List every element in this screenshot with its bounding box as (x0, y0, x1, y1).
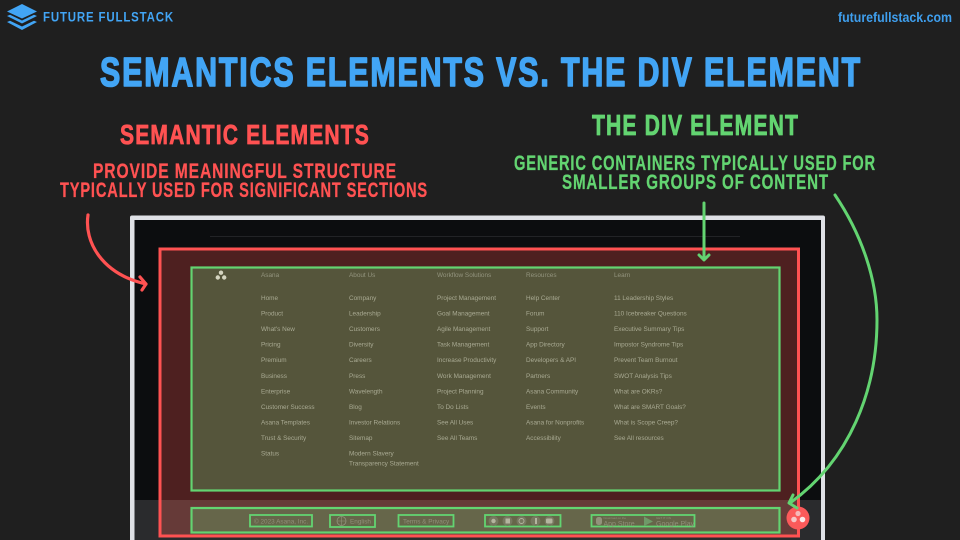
footer column: Asana: Pricing (261, 342, 281, 349)
footer column: About Us (349, 272, 419, 468)
footer column: Workflow Solutions: See All Teams (437, 435, 477, 442)
footer column: Workflow Solutions: Project Management (437, 295, 496, 302)
footer column: Learn: Prevent Team Burnout (614, 357, 678, 364)
heading: the div element: THE DIV ELEMENT (592, 110, 799, 142)
arrow: green curve to bottom badge (789, 195, 877, 508)
footer column: Asana (261, 272, 315, 458)
footer column: About Us: Investor Relations (349, 420, 400, 426)
footer column: Resources: Partners (526, 373, 550, 380)
footer column: Learn: 110 Icebreaker Questions (614, 311, 687, 318)
footer column: Learn: See All resources (614, 435, 664, 442)
footer column: Learn: What are OKRs? (614, 388, 663, 395)
app store badges box: App Store (604, 521, 635, 528)
logo: Future Fullstack (7, 4, 174, 30)
footer column: Asana: Product (261, 311, 283, 318)
footer column: Resources: Resources (526, 272, 557, 279)
footer column: Resources: Developers & API (526, 357, 576, 364)
copyright box: © 2023 Asana, Inc. (254, 517, 308, 525)
footer column: Resources: Asana Community (526, 388, 579, 395)
arrow: red to semantic box (87, 215, 146, 290)
icon: stacked layers (7, 4, 37, 30)
copyright box (250, 515, 312, 526)
footer column: Asana: Enterprise (261, 388, 291, 395)
footer column: Workflow Solutions: Increase Productivity (437, 357, 497, 364)
footer column: Workflow Solutions: Agile Management (437, 326, 491, 333)
app store badges box: GET IT ON (656, 516, 671, 520)
div highlight: bottom bar container (192, 508, 780, 532)
footer column: Asana: What's New (261, 326, 295, 333)
footer column: Learn: What is Scope Creep? (614, 420, 678, 426)
panel: semantic elements description (60, 119, 428, 202)
language box: English (350, 518, 371, 526)
terms box (398, 515, 454, 526)
div highlight: footer links container (192, 268, 780, 490)
footer column: About Us: Sitemap (349, 435, 373, 442)
footer column: About Us: Careers (349, 357, 372, 364)
text: provide meaningful structure: PROVIDE MEANINGFUL STRUCTURE (93, 160, 397, 183)
footer column: Resources: App Directory (526, 342, 566, 349)
footer column: Workflow Solutions: Project Planning (437, 388, 484, 395)
footer column: Learn: Executive Summary Tips (614, 326, 684, 333)
footer column: About Us: Customers (349, 326, 380, 333)
semantic element highlight: red box (160, 249, 798, 537)
footer column: About Us: Modern Slavery (349, 451, 395, 458)
app store badges box (592, 515, 695, 528)
footer column: Workflow Solutions: Work Management (437, 373, 491, 380)
footer column: About Us: Transparency Statement (349, 461, 419, 468)
icon: asana logo (216, 270, 226, 280)
footer column: Resources (526, 272, 584, 442)
footer column: About Us: Blog (349, 404, 362, 411)
logo wordmark: FUTURE FULLSTACK (43, 10, 174, 24)
footer column: Asana: Premium (261, 357, 287, 364)
footer column: Workflow Solutions: Goal Management (437, 311, 490, 318)
footer column: Learn (614, 272, 687, 442)
footer column: Resources: Help Center (526, 295, 561, 302)
footer column: Asana: Status (261, 451, 279, 458)
footer column: Resources: Events (526, 404, 546, 411)
footer column: Workflow Solutions: See All Uses (437, 420, 473, 426)
panel: div element description (514, 110, 876, 194)
footer column: Asana: Asana Templates (261, 420, 310, 426)
footer column: Asana: Asana (261, 272, 280, 279)
terms box: Terms & Privacy (403, 518, 450, 525)
footer column: Asana: Business (261, 373, 287, 380)
footer column: About Us: Wavelength (349, 388, 383, 395)
footer column: Learn: Learn (614, 272, 631, 279)
footer column: About Us: About Us (349, 272, 375, 279)
footer column: Asana: Customer Success (261, 404, 315, 411)
website url: futurefullstack.com (838, 10, 952, 25)
footer column: Asana: Trust & Security (261, 435, 307, 442)
footer column: Learn: Impostor Syndrome Tips (614, 342, 683, 349)
footer column: Learn: What are SMART Goals? (614, 404, 686, 411)
footer column: About Us: Leadership (349, 311, 381, 318)
arrow: green down to div box (699, 203, 709, 260)
footer column: Learn: SWOT Analysis Tips (614, 373, 672, 380)
text: typically used for significant sections: TYPICALLY USED FOR SIGNIFICANT SECTIONS (60, 179, 428, 202)
footer column: About Us: Diversity (349, 342, 374, 349)
footer column: About Us: Company (349, 295, 377, 302)
language box (330, 515, 375, 527)
footer column: Resources: Accessibility (526, 435, 562, 442)
app store badges box: Download on the (604, 516, 626, 520)
footer column: Workflow Solutions: Workflow Solutions (437, 272, 491, 279)
footer column: Resources: Asana for Nonprofits (526, 420, 584, 426)
icon: red asana badge (786, 506, 810, 530)
browser screenshot frame (130, 216, 825, 540)
footer column: Resources: Forum (526, 311, 544, 318)
social icons box (485, 515, 560, 526)
footer column: Asana: Home (261, 295, 278, 302)
footer column: Workflow Solutions (437, 272, 497, 442)
footer column: Workflow Solutions: To Do Lists (437, 404, 469, 411)
heading: semantic elements: SEMANTIC ELEMENTS (120, 119, 370, 150)
footer column: About Us: Press (349, 373, 365, 380)
text: smaller groups of content: SMALLER GROUPS OF CONTENT (562, 171, 829, 194)
footer column: Resources: Support (526, 326, 549, 333)
footer column: Workflow Solutions: Task Management (437, 342, 489, 349)
app store badges box: Google Play (656, 521, 695, 528)
footer column: Learn: 11 Leadership Styles (614, 295, 673, 302)
